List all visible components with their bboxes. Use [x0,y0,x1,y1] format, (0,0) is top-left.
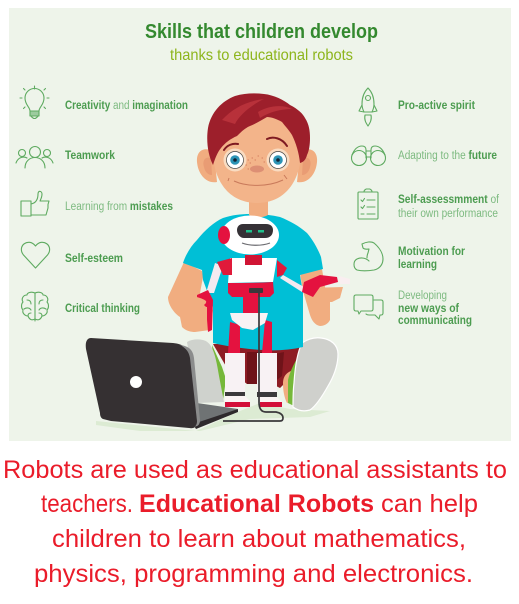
label: developing new ways of communicating: Developing [398,290,447,302]
label: pro-active spirit: Pro-active spirit [398,100,475,112]
illustration: child with robot and laptop [86,93,350,431]
eyes [224,148,246,172]
label: motivation for learning: learning [398,259,437,271]
caption: educational robots: children to learn about mathematics, [52,525,466,553]
robot: torso [228,258,277,283]
icon: thumbs up [21,191,49,216]
nose and freckles [250,166,264,172]
face [213,105,301,203]
caption: educational robots [3,456,507,588]
neck [249,198,268,217]
floor shadow [96,403,330,431]
caption: educational robots: Robots are used as educational assistants to [3,456,507,484]
label: adapting to the future: Adapting to the future [398,150,497,162]
left shoe and sock [212,345,226,401]
icon: light bulb [20,86,49,118]
panel: infographic background [9,8,511,441]
label: creativity: Creativity and imagination [65,100,188,112]
title: Skills that children develop [145,21,378,43]
hands [197,290,213,332]
subtitle: thanks to educational robots [170,47,353,64]
label: teamwork: Teamwork [65,150,116,162]
ears [197,149,217,182]
label: self-assessment [398,194,500,220]
label: developing new ways of communicating: communicating [398,315,472,327]
icon: heart [21,242,50,268]
label: motivation for learning: Motivation for [398,246,465,258]
laptop [188,403,238,428]
label: motivation for learning [398,246,465,271]
caption: educational robots: can help [381,490,478,518]
icon: teamwork [16,146,53,168]
caption: educational robots: physics, programming and electronics. [34,560,473,588]
label: learning from mistakes: Learning from mistakes [65,201,173,213]
eyebrows [224,138,287,150]
label: self-esteem: Self-esteem [65,253,123,265]
icon: flexed arm [354,242,383,271]
icon: brain [22,292,48,321]
label: developing new ways of communicating: new ways of [398,303,459,315]
icon: binoculars [352,146,386,166]
robot: waist and hips [243,297,258,313]
icon: clipboard checklist [358,189,378,219]
shorts [213,344,303,388]
label: self-assessment: their own performance [398,208,498,220]
icon: speech bubbles [354,295,383,319]
right leg and shoe [283,371,293,403]
label: developing new ways of communicating [398,290,472,327]
t-shirt [183,214,323,350]
robot: legs [228,320,272,353]
smile [228,175,287,185]
label: critical thinking: Critical thinking [65,303,140,315]
robot: head [221,216,279,254]
label: self-assessment: Self-assessmment of [398,194,500,206]
hair [207,93,310,165]
caption: educational robots: Educational Robots [139,490,374,518]
cable [223,292,283,421]
left arm [168,262,213,332]
right arm [300,269,330,326]
robot: arms [206,263,304,293]
icon: rocket [359,88,377,126]
caption: educational robots: teachers. [41,490,133,518]
